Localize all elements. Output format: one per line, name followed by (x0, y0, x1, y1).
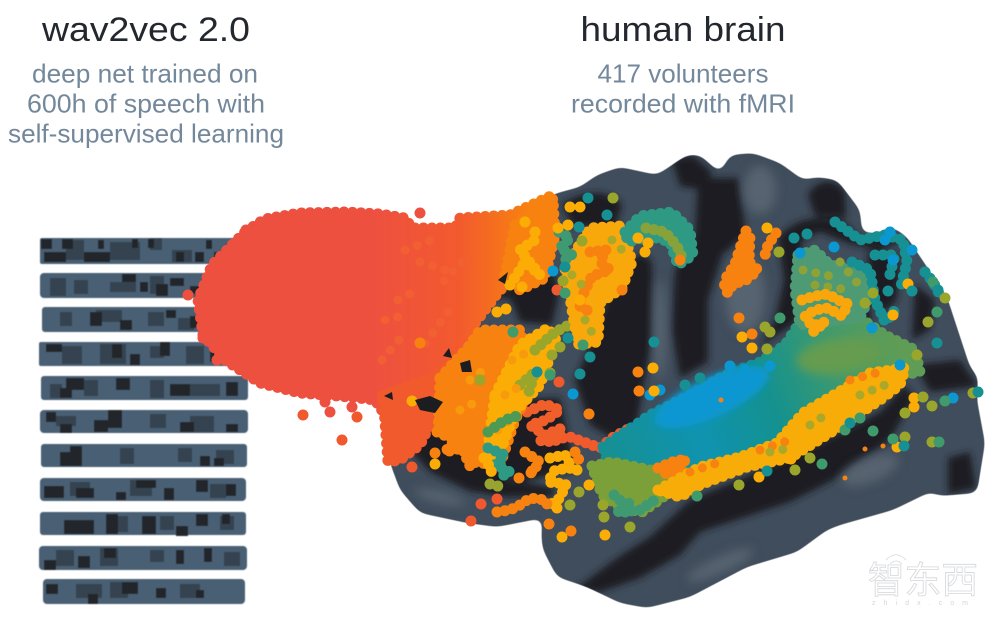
yellow band (658, 368, 905, 497)
olive in arc (646, 228, 684, 262)
orange patch (578, 250, 610, 312)
main teal mass (603, 318, 920, 472)
orange streak right (765, 233, 776, 255)
title: human brain: human brain (580, 11, 786, 49)
band olive edge (770, 385, 885, 452)
teal ring chains (835, 222, 940, 322)
red point cloud (198, 195, 553, 455)
amber upper mass (565, 226, 632, 344)
upper right amber core (802, 294, 848, 336)
teal dots (537, 198, 978, 471)
stray orange-red dots (303, 290, 572, 521)
brain sulci (405, 155, 978, 592)
watermark: 智东西 (868, 555, 978, 607)
orange dots (420, 260, 752, 531)
top orange mass (505, 200, 555, 290)
blue dots (553, 232, 953, 398)
speech spectrogram bars (39, 238, 248, 604)
ridge highlights (413, 166, 902, 587)
brain surface (386, 153, 985, 608)
red-orange lower patch (527, 404, 562, 442)
mottled cloud texture (382, 240, 462, 360)
orange clump (525, 452, 580, 474)
text block: wav2vec description: self-supervised learning (8, 118, 284, 148)
brain (386, 153, 985, 608)
green dots (513, 282, 945, 496)
text block: wav2vec description: 600h of speech with (27, 88, 265, 118)
green arc (625, 212, 693, 265)
olive mottling upper (572, 240, 622, 338)
lower left red-orange mass (383, 350, 470, 462)
blue core (647, 354, 777, 440)
stray red dots (188, 213, 420, 412)
green patch below (614, 495, 655, 512)
band mottling (690, 372, 880, 472)
green column (559, 232, 572, 262)
amber dots (412, 207, 914, 537)
text block: wav2vec description (8, 58, 284, 148)
upper right olive mottling (803, 262, 858, 290)
lower left green mass (592, 462, 690, 512)
orange lower lobe (437, 432, 470, 466)
amber dots top (510, 240, 540, 285)
text block: human brain description: 417 volunteers (598, 58, 768, 88)
dark flecks in cloud (384, 272, 508, 413)
tiny orange flecks (721, 400, 883, 478)
activation cloud (188, 195, 978, 537)
watermark signal arcs (886, 555, 906, 564)
amber mid mass (487, 328, 556, 458)
orange streak (724, 231, 758, 293)
text block: human brain description (571, 58, 795, 118)
orange patch in green mass (658, 459, 686, 474)
green core (794, 332, 886, 380)
text block: wav2vec description: deep net trained on (32, 58, 258, 88)
text block: human brain description: recorded with fMRI (571, 88, 795, 118)
lower chain red-orange (410, 418, 630, 448)
watermark domain: zhidx.com (872, 600, 968, 607)
title: wav2vec 2.0: wav2vec 2.0 (41, 11, 250, 49)
olive chain (520, 317, 597, 395)
lower amber clump (548, 455, 572, 505)
watermark name: 智东西 (868, 560, 978, 601)
olive dots (480, 198, 973, 527)
upper right green cluster (795, 250, 870, 325)
orange mid mass (438, 330, 535, 465)
amber mottling (460, 352, 528, 430)
